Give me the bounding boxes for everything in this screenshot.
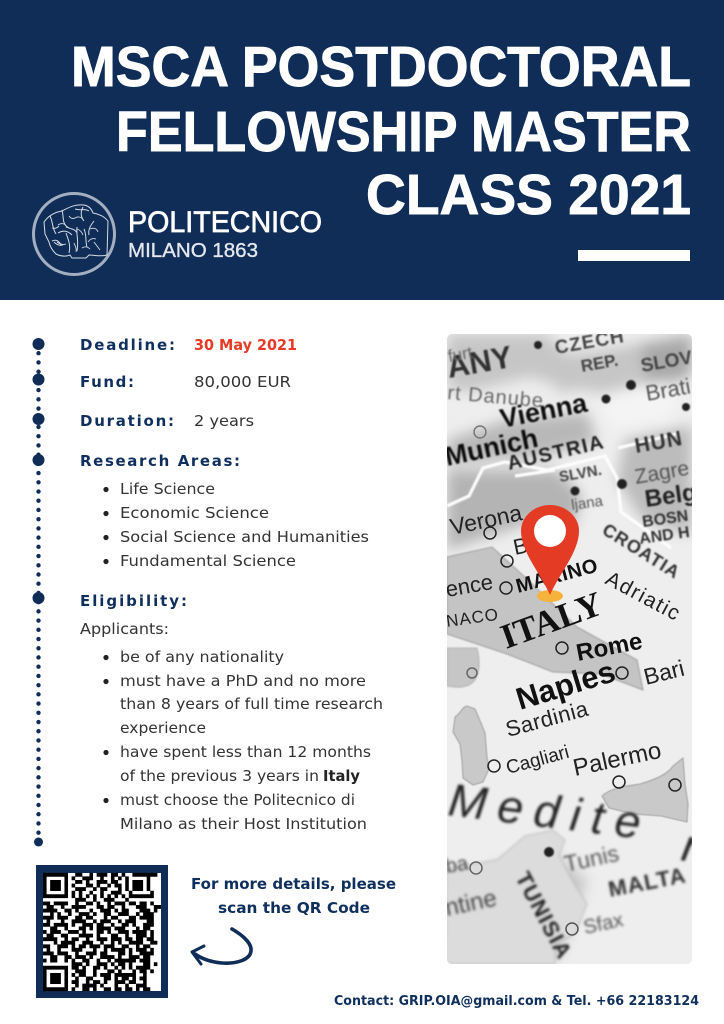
map labels, blurred north: Vienna (497, 387, 591, 434)
research areas list: Economic Science (120, 504, 269, 522)
title underline bar (578, 250, 690, 261)
Sardinia island (453, 706, 489, 785)
timeline dots (32, 338, 44, 846)
map labels, sharp south: Bari (641, 655, 687, 690)
research areas list: Social Science and Humanities (120, 528, 369, 546)
map labels, sharp south: NACO (445, 605, 500, 631)
eligibility list: than 8 years of full time research (120, 695, 383, 713)
logo seal (34, 194, 114, 274)
fund row (80, 373, 291, 391)
title (71, 35, 691, 227)
map labels, blurred north: SLOV (639, 347, 694, 377)
map labels, sharp south: ence (444, 569, 495, 602)
map labels, sharp south: Palermo (571, 737, 664, 782)
duration row: 2 years (194, 412, 254, 430)
fund row: Fund: (80, 373, 134, 391)
map labels, blurred north: CROATIA (599, 519, 684, 583)
map labels, blurred north (442, 326, 698, 583)
map labels, blurred north: REP. (579, 351, 620, 376)
map labels, sharp south: ITALY (495, 584, 607, 657)
map labels, sharp south: Sardinia (503, 696, 591, 742)
eligibility list: must choose the Politecnico di (120, 791, 355, 809)
map labels, blurred north: SLVN. (558, 462, 603, 486)
map labels, blurred north: ANY (444, 339, 515, 385)
eligibility list: experience (120, 719, 206, 737)
eligibility list (103, 648, 383, 833)
location pin (521, 505, 579, 602)
map labels, sharp south: MARINO (514, 555, 601, 598)
header banner (0, 0, 724, 300)
map labels, blurred north: ljana (570, 493, 605, 514)
map labels, blurred Mediterranean (447, 782, 692, 961)
logo: Politecnico di Milano (34, 194, 322, 274)
Tunisia coast (445, 830, 587, 964)
map labels, blurred Mediterranean: TUNISIA (511, 868, 577, 963)
eligibility list: Italy (323, 767, 360, 785)
map labels, blurred north: CZECH (553, 326, 626, 359)
contact line: Contact: GRIP.OIA@gmail.com & Tel. +66 22183124 (334, 994, 699, 1009)
map labels, blurred Mediterranean: Tunis (562, 840, 621, 877)
icon: curved arrow to QR code (192, 929, 251, 964)
map labels, blurred north: Brati (644, 373, 692, 406)
map labels, sharp south: Adriatic (602, 567, 685, 626)
duration row (80, 412, 254, 430)
map labels, blurred north: Zagre (633, 457, 691, 489)
QR code (36, 865, 168, 998)
map labels, blurred Mediterranean: MALTA (606, 862, 688, 902)
eligibility list: have spent less than 12 months (120, 743, 371, 761)
eligibility heading: Eligibility: (80, 592, 187, 610)
scan prompt: For more details, please (191, 875, 396, 893)
map labels, blurred north: Belg (643, 479, 698, 513)
map labels, blurred north: rt Danube (447, 382, 545, 412)
deadline row: Deadline: (80, 336, 175, 354)
scan prompt: scan the QR Code (218, 899, 370, 917)
map labels, blurred north: furt (446, 343, 474, 366)
eligibility list: Milano as their Host Institution (120, 815, 367, 833)
research areas list: Fundamental Science (120, 552, 296, 570)
map labels, blurred north: HUN (633, 427, 685, 458)
map labels, blurred Mediterranean: ba (444, 852, 471, 878)
map of Italy (442, 326, 704, 964)
eligibility list: of the previous 3 years in (120, 767, 319, 785)
eligibility list: must have a PhD and no more (120, 672, 366, 690)
map capital markers (534, 341, 690, 857)
map labels, blurred north: BOSN (641, 508, 689, 531)
map labels, blurred north: AND H (638, 524, 691, 548)
logo wordmark: POLITECNICO (128, 206, 322, 239)
map labels, blurred Mediterranean: Medite (446, 773, 655, 850)
map relief shading (447, 334, 692, 960)
map labels, blurred Mediterranean: r (678, 819, 704, 873)
map labels, blurred Mediterranean: ntine (443, 885, 499, 922)
deadline row: 30 May 2021 (194, 336, 297, 354)
scan prompt (191, 875, 396, 917)
map labels, sharp south: Rome (574, 628, 645, 667)
map coastline white ridges (447, 434, 676, 548)
map labels, sharp south: Naples (512, 653, 619, 717)
research areas heading: Research Areas: (80, 452, 240, 470)
duration row: Duration: (80, 412, 174, 430)
map labels, sharp south: Verona (448, 499, 525, 540)
title: CLASS 2021 (366, 163, 691, 227)
Italy land outline (447, 547, 643, 690)
map labels, blurred Mediterranean: Sfax (581, 909, 625, 939)
deadline row (80, 336, 297, 354)
map city markers (467, 426, 681, 935)
logo wordmark: MILANO 1863 (128, 240, 258, 262)
research areas list: Life Science (120, 480, 215, 498)
Corsica island (447, 648, 479, 687)
map labels, sharp south: Bo (511, 530, 542, 560)
Sicily island (602, 758, 688, 822)
applicants label: Applicants: (80, 620, 169, 638)
title: MSCA POSTDOCTORAL (71, 35, 691, 99)
research areas list (103, 480, 369, 570)
map labels, blurred north: AUSTRIA (505, 431, 607, 475)
map labels, sharp south (444, 499, 687, 782)
fund row: 80,000 EUR (194, 373, 291, 391)
logo wordmark (128, 206, 322, 262)
map labels, blurred north: Munich (442, 423, 541, 472)
eligibility list: be of any nationality (120, 648, 284, 666)
map labels, sharp south: Cagliari (504, 742, 572, 779)
